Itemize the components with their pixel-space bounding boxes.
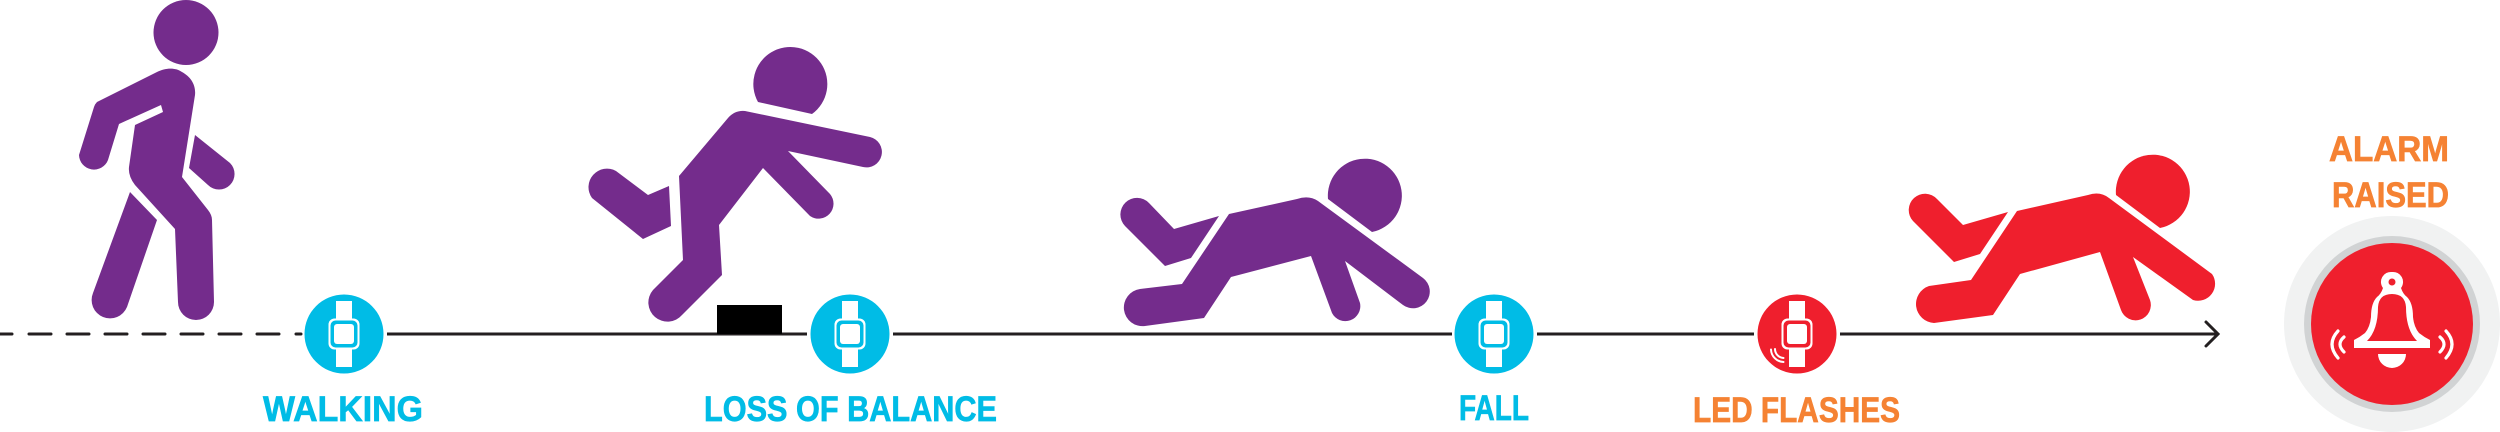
icon: watch with LED flashing	[1758, 294, 1836, 374]
label: walking: WALKING	[263, 390, 423, 429]
sound waves	[2332, 331, 2452, 358]
bell	[2354, 272, 2430, 348]
figure: person losing balance	[588, 47, 882, 322]
icon: watch loss of balance	[810, 294, 890, 374]
obstacle: black step	[717, 305, 782, 334]
figure: fallen person in red	[1909, 155, 2215, 323]
label: alarm raised: RAISED	[2332, 176, 2449, 215]
timeline: dashed lead-in	[0, 332, 301, 336]
figure: person falling	[1120, 159, 1430, 326]
icon: watch fall	[1454, 294, 1534, 374]
label: fall: FALL	[1459, 389, 1529, 428]
icon: alarm button with bell	[2284, 216, 2500, 432]
clapper	[2378, 354, 2406, 368]
label: alarm raised: ALARM	[2329, 130, 2449, 169]
label: alarm raised	[2329, 130, 2449, 215]
icon: watch walking	[304, 294, 384, 374]
label: LED flashes: LED FLASHES	[1693, 391, 1900, 430]
timeline: solid line with arrow	[387, 322, 2218, 346]
label: loss of balance: LOSS OF BALANCE	[704, 390, 997, 429]
figure: walking person	[79, 0, 235, 320]
